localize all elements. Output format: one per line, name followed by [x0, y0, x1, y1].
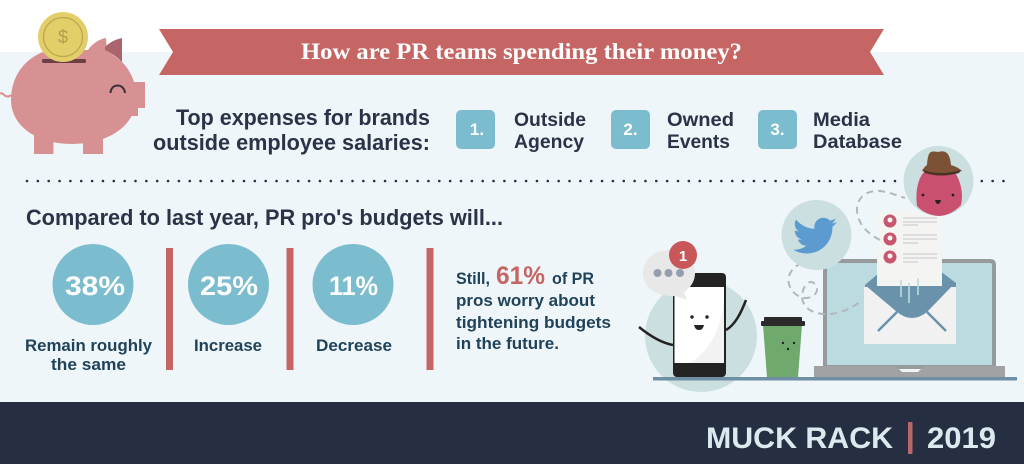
title: How are PR teams spending their money?: [301, 39, 742, 65]
stat: 38%: the same: [51, 355, 126, 374]
desk line: [653, 377, 1017, 380]
illustration: desk: [639, 146, 1017, 392]
footer year: 2019: [927, 422, 996, 455]
coin: $: [58, 27, 68, 47]
title banner: [159, 29, 884, 75]
expenses heading: outside employee salaries:: [153, 130, 430, 155]
stat: 25%: [188, 244, 269, 355]
expense 1: [456, 110, 586, 153]
callout: 61% worry: in the future.: [456, 334, 559, 353]
expenses heading: Top expenses for brands: [176, 105, 430, 130]
stat: 11%: 11%: [329, 271, 378, 301]
callout: 61% worry: [456, 262, 611, 353]
footer bar: [0, 402, 1024, 464]
stat: 38%: 38%: [65, 271, 125, 301]
coin: [38, 12, 88, 62]
document list: [877, 211, 942, 303]
callout: 61% worry: Still,: [456, 269, 490, 288]
pig ear: [105, 38, 122, 62]
icon: twitter badge: [782, 200, 852, 270]
expenses heading: [153, 105, 430, 155]
icon: phone character: [639, 273, 757, 392]
dashed connector paths: [788, 191, 905, 314]
expense 3: [758, 110, 902, 153]
expense 1: Agency: [514, 132, 584, 153]
footer brand: MUCK RACK: [706, 422, 893, 455]
expense 3: 3.: [770, 120, 785, 139]
callout: 61% worry: pros worry about: [456, 291, 595, 310]
icon: piggy bank with coin: [0, 12, 145, 154]
stat: 38%: [25, 244, 153, 374]
icon: octopus in hat: [904, 146, 974, 216]
expense 2: Events: [667, 132, 730, 153]
expense 1: Outside: [514, 110, 586, 131]
stat: 38%: Remain roughly: [25, 336, 153, 355]
expense 3: Database: [813, 132, 902, 153]
icon: chat bubble notification: [643, 241, 697, 300]
icon: envelope: [864, 268, 956, 344]
stat: 25%: 25%: [200, 271, 258, 301]
expense 2: Owned: [667, 110, 734, 131]
budgets heading: Compared to last year, PR pro's budgets will...: [26, 205, 503, 230]
icon: chat bubble notification: 1: [679, 248, 687, 265]
stat: 25%: Increase: [194, 336, 262, 355]
stat: 11%: Decrease: [316, 336, 392, 355]
laptop: [814, 261, 1005, 377]
icon: coffee cup: [761, 317, 805, 377]
expense 2: [611, 110, 734, 153]
callout: 61% worry: of PR: [552, 269, 594, 288]
callout: 61% worry: tightening budgets: [456, 313, 611, 332]
expense 3: Media: [813, 110, 870, 131]
expense 1: 1.: [470, 120, 484, 139]
expense 2: 2.: [623, 120, 638, 139]
callout: 61% worry: 61%: [496, 262, 545, 290]
stat: 11%: [312, 244, 394, 355]
